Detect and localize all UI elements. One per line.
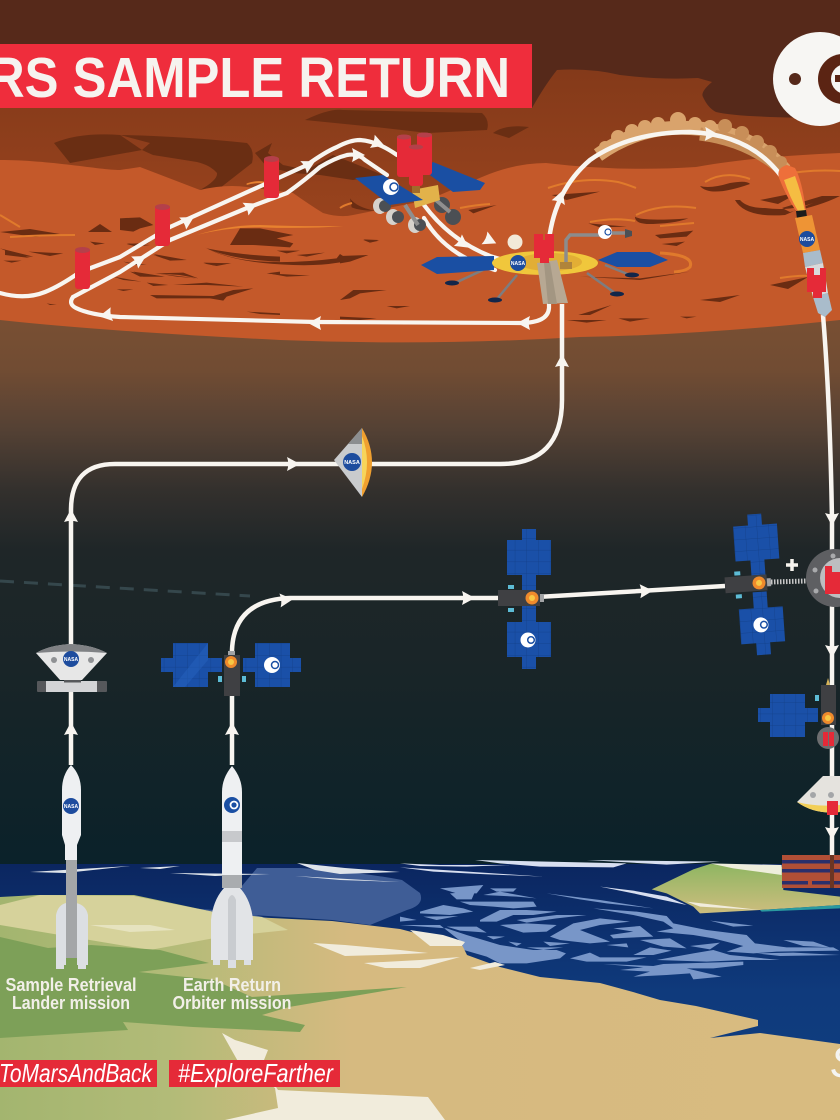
orbiter after launch: [161, 643, 301, 696]
sample retrieval lander stowed in cruise: NASA: [64, 657, 78, 663]
launch rocket: NASA: [56, 765, 88, 969]
faint parking orbit dashed line: [0, 581, 250, 596]
mission trajectory: orbiter to Mars orbit: [232, 586, 725, 765]
sample retrieval lander stowed in cruise: [36, 644, 107, 692]
Mars entry capsule: [334, 428, 372, 497]
orbiter cruising to Mars: [498, 529, 551, 669]
mission trajectory: lander to Mars: [71, 304, 562, 765]
sample retrieval lander on Mars: NASA: [511, 261, 525, 267]
Mars: orange crater rims: [0, 170, 840, 278]
launch rocket: NASA: NASA: [64, 804, 78, 810]
rocket exhaust plume over Mars: [598, 112, 787, 172]
orbiter capturing sample container: [720, 513, 786, 657]
Earth: pale salt flats: [222, 930, 505, 1120]
sample tube 1: [75, 247, 90, 289]
Mars ascent vehicle rocket: NASA: [800, 237, 814, 243]
mission label: Earth Return Orbiter: [172, 975, 292, 1013]
orbiting sample container: [806, 549, 840, 607]
sample tube 2: [155, 204, 170, 246]
Mars entry capsule: NASA: [344, 460, 360, 466]
Earth: high clouds at left: [30, 863, 400, 882]
mission label: Earth Return Orbiter: Orbiter mission: [172, 993, 292, 1013]
trajectory arrowheads: [64, 127, 839, 840]
sample tube 3: [264, 156, 279, 198]
mission trajectory: rover outbound and return tracks: [0, 140, 549, 323]
launch rocket: ESA Ariane: [211, 766, 253, 968]
tether to container: [771, 581, 806, 582]
logo: ESA disc: [773, 32, 840, 126]
sample fetch rover: [355, 132, 485, 233]
background: space and atmosphere gradient: [0, 310, 840, 910]
Earth: large land mass: [0, 895, 840, 1120]
mission trajectory: ascent arc of rocket: [549, 132, 790, 240]
mission label: Sample Retrieval Lander: [6, 975, 136, 1013]
Mars: far dark sky band: [0, 0, 840, 200]
sample retrieval lander on Mars: [421, 225, 668, 304]
mission trajectory: return to Earth: [823, 315, 832, 860]
Earth: shallow sea near launch coast: [0, 868, 421, 925]
orbiter returning to Earth: [758, 678, 839, 749]
recovery facility building: [782, 855, 840, 888]
hashtag label: ExploreFarther: #ExploreFarther: [178, 1058, 334, 1088]
Earth: far coast at right: [652, 863, 840, 913]
mission label: Sample Retrieval Lander: Sample Retrieval: [6, 975, 136, 995]
plus sign: [786, 559, 798, 571]
Earth: vegetation shading: [0, 895, 407, 1038]
Mars: surface shadow marks: [0, 181, 840, 323]
hashtag label: ToMarsAndBack: ToMarsAndBack: [0, 1058, 154, 1088]
Earth: reefs and clouds over ocean: [400, 860, 840, 979]
Earth: ocean: [0, 864, 840, 1120]
mission label: Sample Retrieval Lander: Lander mission: [12, 993, 130, 1013]
title banner: RS SAMPLE RETURN: [0, 46, 510, 110]
Mars ascent vehicle rocket: [778, 165, 832, 317]
Mars: surface layers: [0, 70, 840, 342]
Earth entry vehicle: [797, 776, 840, 815]
mission label: Earth Return Orbiter: Earth Return: [183, 975, 281, 995]
